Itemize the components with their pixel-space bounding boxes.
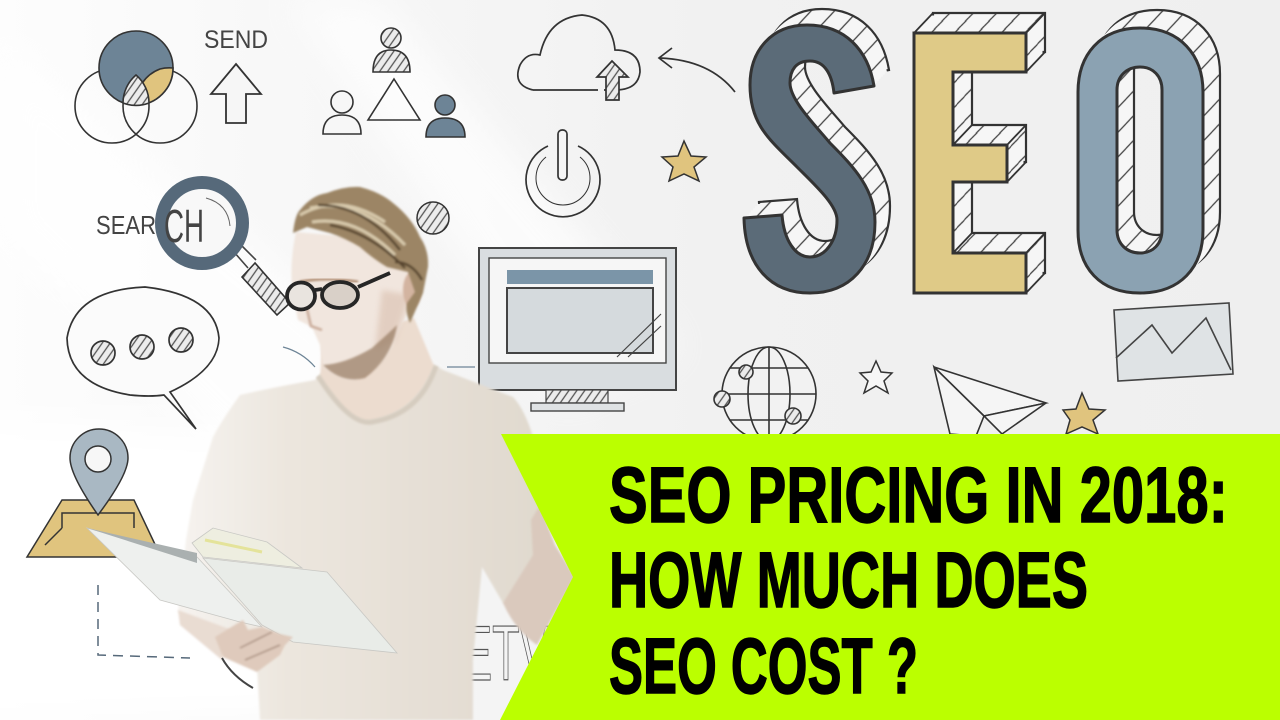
shadow on cheek [375,290,410,350]
icon: people network [323,28,465,137]
glasses [287,273,390,310]
icon: speech bubble [67,287,219,429]
right cover [203,558,397,653]
icon: envelope [1114,303,1233,381]
icon: map pin [27,429,190,658]
wrist strap [222,658,253,688]
banner [500,434,1280,720]
icon: magnifier with search text: SEAR [96,210,156,240]
icon: power button [526,130,600,217]
icon: gold star right [1063,393,1105,434]
icon: paper plane [934,367,1046,436]
icon: globe [714,347,816,441]
SEO letters [744,9,1220,293]
book pages [192,528,302,568]
letter O [1078,10,1220,293]
icon: cloud upload [518,15,640,100]
neck [320,318,434,420]
icon: send arrow [204,26,268,123]
book [87,528,397,653]
man [87,187,575,720]
background lines near neck [283,347,475,367]
icon: monitor [479,248,676,411]
hair [293,187,428,323]
left cover [87,528,262,627]
sweater [178,364,545,720]
icon: curved arrow [659,48,735,92]
letter S [744,9,890,293]
icon: magnifier with search text [96,182,449,315]
beard [323,325,397,379]
icon: small star [860,361,892,393]
ear [403,272,421,308]
icon: gold star [662,141,706,181]
right arm and hand [503,505,575,645]
icon: magnifier with search text: CH [164,200,204,252]
face [291,232,418,380]
title line 3: SEO COST ? [609,621,918,710]
collar [318,366,436,422]
left hand [215,620,293,672]
left forearm [178,610,232,660]
partly hidden letters behind man: ETV [462,609,550,697]
icon: send arrow: SEND [204,26,268,54]
icon: venn diagram [75,31,197,143]
eyebrow [300,279,358,282]
lips [322,340,348,344]
nose shadow [306,305,322,330]
letter E [914,13,1045,293]
